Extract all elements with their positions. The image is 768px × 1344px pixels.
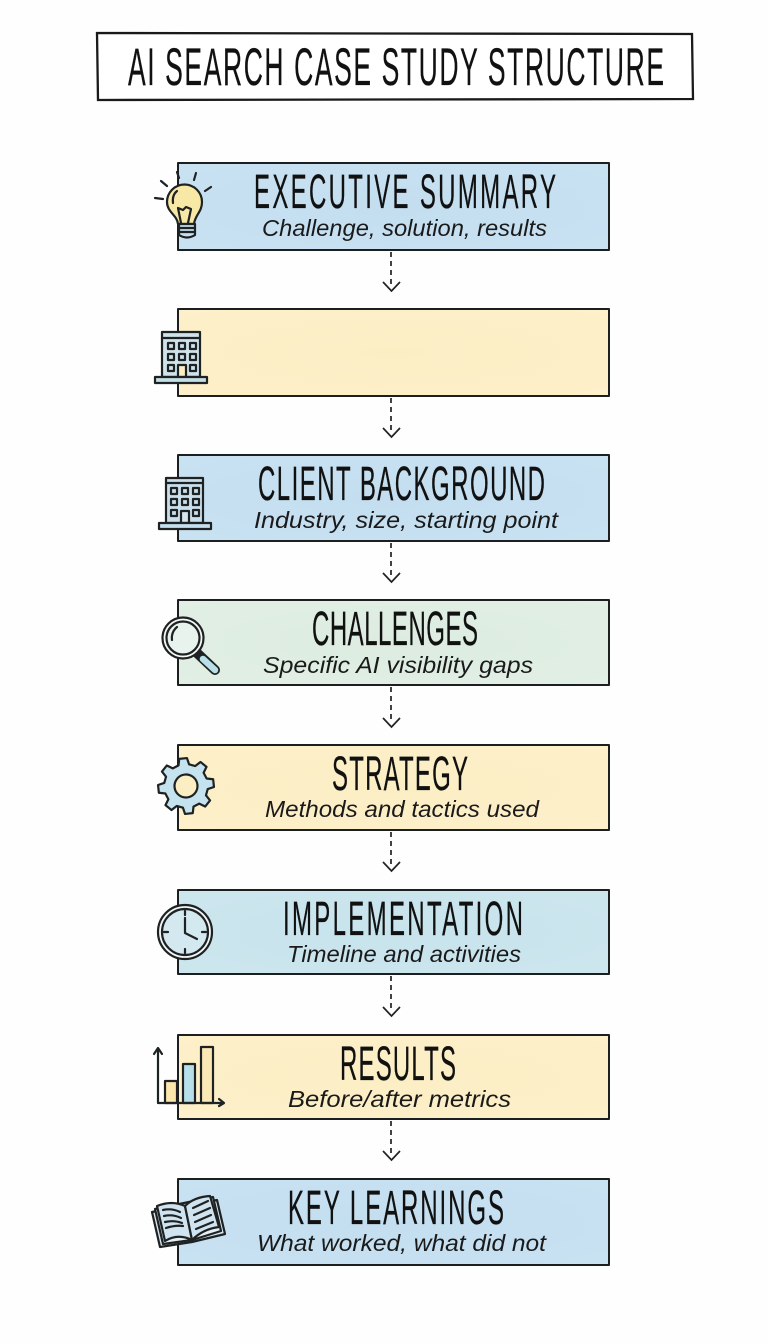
arrow xyxy=(383,976,400,1016)
icon: magnifying glass xyxy=(162,618,215,670)
heading: results: RESULTS xyxy=(340,1038,456,1091)
arrow xyxy=(383,398,400,437)
title: AI SEARCH CASE STUDY STRUCTURE xyxy=(128,37,664,96)
panel: implementation xyxy=(178,890,609,974)
icon: open book xyxy=(152,1196,225,1247)
icon: building xyxy=(155,332,207,383)
icon: bar chart xyxy=(154,1047,224,1106)
icon: light bulb xyxy=(155,172,211,238)
arrow xyxy=(383,252,400,291)
heading: strategy: STRATEGY xyxy=(332,748,468,801)
arrow xyxy=(383,832,400,871)
text: challenges detail: Specific AI visibility gaps xyxy=(263,652,534,678)
panel: executive summary xyxy=(178,163,609,250)
arrow xyxy=(383,1121,400,1160)
icon: gear xyxy=(156,756,216,816)
heading: implementation: IMPLEMENTATION xyxy=(283,893,523,946)
panel: client background xyxy=(178,455,609,541)
icon: building xyxy=(159,478,211,529)
text: executive summary detail: Challenge, solution, results xyxy=(262,215,548,241)
arrow xyxy=(383,543,400,582)
heading: client background: CLIENT BACKGROUND xyxy=(258,458,545,511)
text: results detail: Before/after metrics xyxy=(288,1086,512,1112)
text: implementation detail: Timeline and activities xyxy=(287,941,522,967)
heading: challenges: CHALLENGES xyxy=(312,603,478,656)
panel: results xyxy=(178,1035,609,1119)
heading: executive summary: EXECUTIVE SUMMARY xyxy=(254,166,556,219)
panel: key learnings xyxy=(178,1179,609,1265)
text: strategy detail: Methods and tactics used xyxy=(265,796,540,822)
text: key learnings detail: What worked, what did not xyxy=(257,1230,548,1256)
heading: key learnings: KEY LEARNINGS xyxy=(288,1182,504,1235)
panel: challenges xyxy=(178,600,609,685)
arrow xyxy=(383,687,400,727)
panel: blank yellow xyxy=(178,309,609,396)
panel: strategy xyxy=(178,745,609,830)
icon: clock xyxy=(158,905,212,959)
text: client background detail: Industry, size, starting point xyxy=(254,507,560,533)
